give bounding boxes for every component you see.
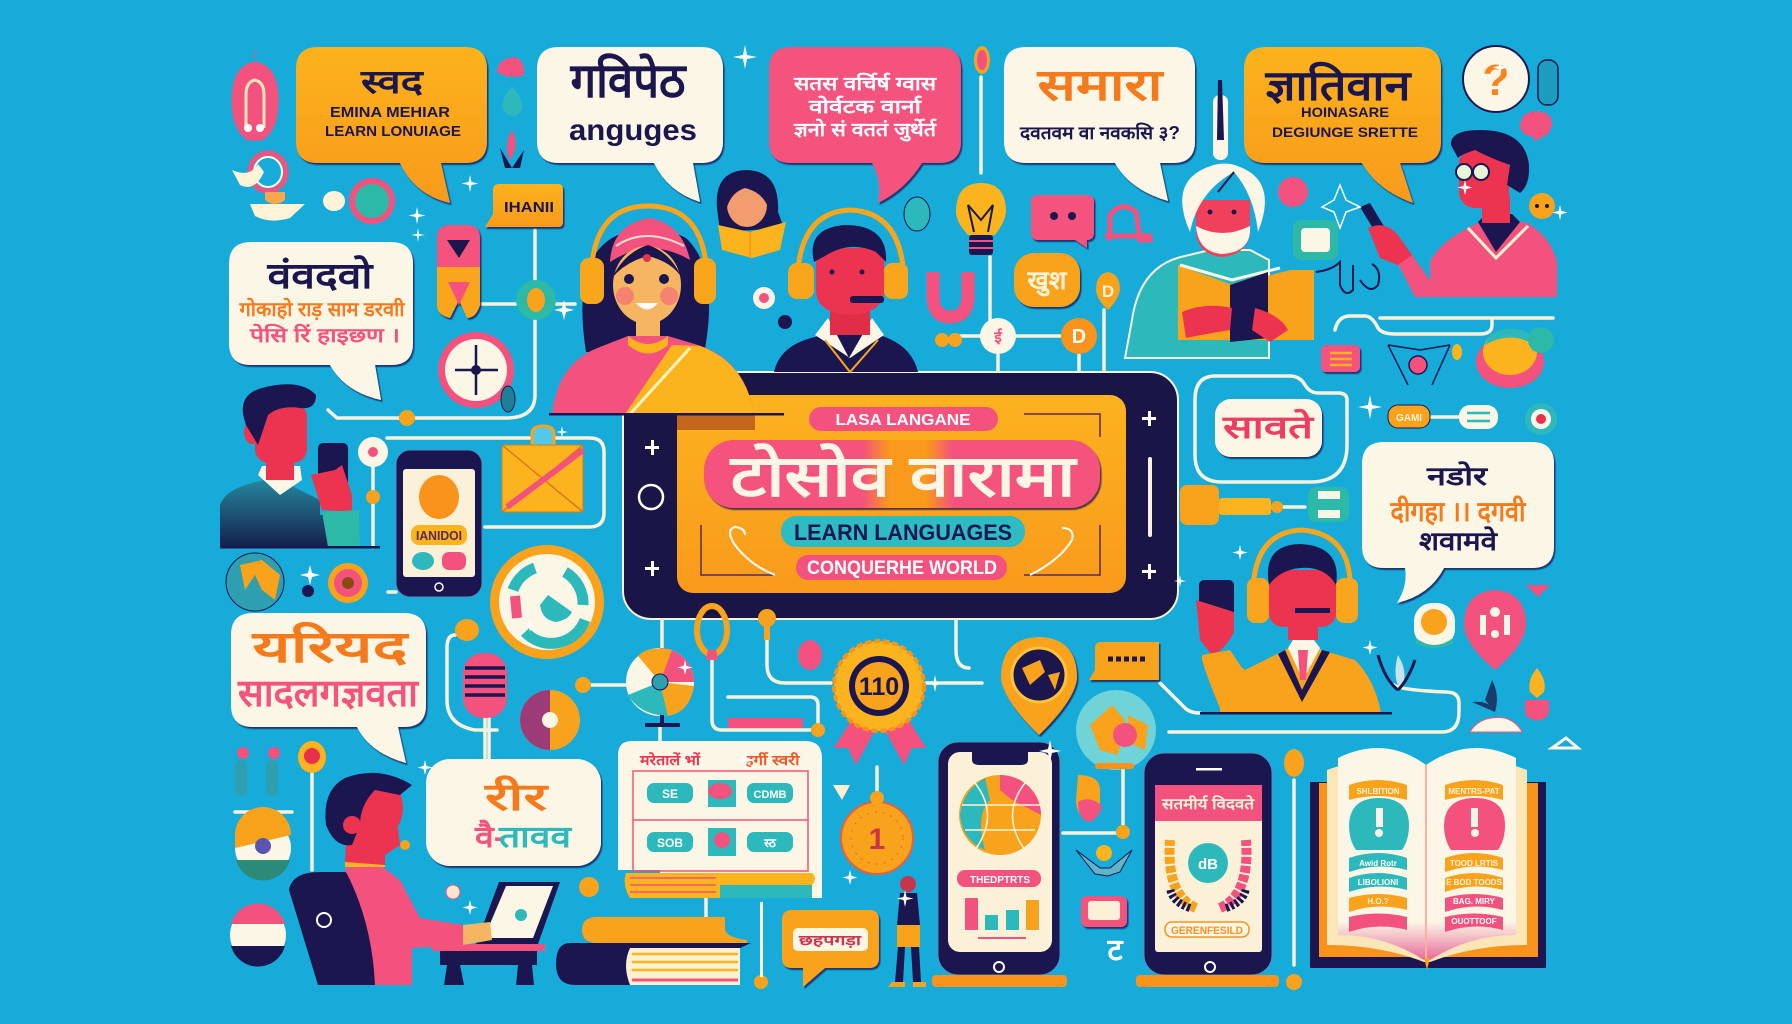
- icon: wire ball bottom: [754, 902, 768, 989]
- icon: timer: [841, 791, 913, 874]
- icon: ball on wire: [399, 410, 415, 426]
- speech bubble: cream right: शवामवे: [1419, 526, 1499, 556]
- icon: orange D pin: D: [1102, 282, 1114, 301]
- speech bubble: cream lower centre: [426, 759, 601, 866]
- speech bubble: cream right: दीगहा ।। दगवी: [1390, 495, 1527, 527]
- speech bubble: orange top right: ज्ञातिवान: [1264, 61, 1412, 109]
- icon: phone with globe: THEDPTRTS: [970, 875, 1030, 886]
- central phone: [623, 372, 1178, 619]
- icon: pink stack tag: [1321, 345, 1360, 372]
- speech bubble: orange top left: LEARN LONUIAGE: [325, 123, 461, 140]
- icon: small pink chat: [1520, 111, 1552, 142]
- icon: orange-red pin: [298, 741, 326, 773]
- connector wires: [235, 77, 1553, 965]
- icon: black dot: [302, 585, 314, 597]
- speech bubble: cream right: नडोर: [1426, 461, 1489, 491]
- icon: pink seal: [798, 640, 822, 670]
- icon: open book: MENTRS-PAT: [1448, 787, 1500, 796]
- icon: horseshoe pin top left: [232, 50, 278, 140]
- icon: cream coin: [446, 885, 460, 899]
- icon: teal lens: [349, 178, 395, 224]
- icon: small rings: [501, 287, 792, 412]
- icon: envelope: [502, 426, 583, 512]
- icon: phone with globe: [932, 742, 1067, 987]
- icon: phone with laurel: सतमीर्य विदवते: [1161, 795, 1256, 813]
- icon: orange chat tag with script: छहपगड़ा: [798, 932, 863, 948]
- icon: question mark circle: ?: [1483, 56, 1509, 105]
- icon: small cream node: [358, 437, 388, 504]
- icon: circular chart: [490, 545, 604, 659]
- icon: right side pills: GAMI: [1396, 413, 1422, 424]
- person: woman with headphones: [549, 206, 784, 416]
- title pill: main Hindi title: टोसोव वारामा: [729, 443, 1078, 509]
- speech bubble: orange top left: स्वद: [360, 63, 425, 100]
- person: man with headset: [774, 210, 918, 372]
- icon: clock: [438, 332, 514, 408]
- label: cream pill with red text: [1215, 399, 1322, 457]
- icon: lesson panel: मरेतालें भों: [639, 752, 702, 768]
- icon: pin wire balls: [1284, 749, 1304, 990]
- icon: plant leaves right: [1378, 655, 1497, 712]
- icon: orange script tile: [1014, 253, 1080, 307]
- icon: pink arch: [1108, 207, 1150, 240]
- icon: glasses squiggle: [1316, 262, 1379, 293]
- speech bubble: cream left: पेसि रिं हाइछण ।: [249, 323, 400, 347]
- icon: lesson panel: SE: [662, 787, 678, 801]
- speech bubble: cream top: गविपेठ: [570, 53, 688, 108]
- screen shadow patch: [677, 415, 755, 430]
- icon: small top-wire pin: [974, 46, 990, 74]
- icon: orange chat tag IHANII: IHANII: [504, 199, 554, 216]
- icon: stack of books: [556, 917, 751, 985]
- badge: rosette 110: [834, 641, 926, 765]
- icon: orange script tile: खुश: [1027, 265, 1068, 297]
- speech bubble: cream with orange heading: दवतवम वा नवकसि ३?: [1019, 122, 1180, 143]
- icon: bottom mid small items: [1076, 775, 1102, 822]
- icon: orange chat tag with script: [782, 910, 879, 987]
- icon: ball: [575, 677, 591, 693]
- icon: lesson panel: [618, 741, 822, 898]
- icon: capsule: [437, 225, 480, 318]
- icon: flags: [235, 807, 291, 881]
- speech bubble: cream with orange heading: [1004, 47, 1195, 201]
- icon: left phone: IANIDOI: [416, 528, 462, 543]
- icon: connector node D: D: [1072, 326, 1086, 348]
- title pill: CONQUERHE WORLD: CONQUERHE WORLD: [807, 558, 997, 579]
- phone screen: [677, 395, 1126, 593]
- person: man at laptop: [289, 773, 560, 985]
- icon: pie chart on stand: [626, 648, 694, 725]
- icon: open book: H.O.?: [1367, 897, 1389, 906]
- speech bubble: pink top: सतस वर्चिर्ष ग्वास: [793, 72, 937, 95]
- icon: open book: BAG. MIRY: [1453, 897, 1496, 906]
- badge: rosette 110: 110: [859, 673, 899, 701]
- icon: open book: LIBOLIONI: [1358, 878, 1398, 887]
- icon: small white script mark: ट: [1106, 934, 1124, 967]
- icon: orange ring tool: [697, 606, 727, 660]
- icon: small white mound: [1470, 718, 1522, 732]
- title pill: LASA LANGANE: [809, 407, 998, 431]
- speech bubble: cream lower left: यरियद: [251, 621, 410, 672]
- icon: orange dome: [1476, 327, 1554, 388]
- icon: lesson panel: CDMB: [754, 789, 787, 801]
- icon: sparkle star: [1322, 185, 1360, 228]
- speech bubble: cream left: वंवदवो: [266, 255, 374, 296]
- label: cream pill with red text: सावते: [1222, 408, 1315, 445]
- speech bubble: pink top: वोर्वटक वार्ना: [808, 95, 922, 118]
- screen decorative brackets: [701, 414, 1100, 575]
- icon: lightbulb: [956, 183, 1006, 255]
- icon: orange wire blob: [455, 619, 479, 641]
- icon: orange coin: [579, 877, 599, 897]
- speech bubble: orange top right: DEGIUNGE SRETTE: [1272, 124, 1418, 140]
- speech bubble: cream right: [1362, 442, 1554, 603]
- speech bubble: cream lower centre: रीर: [483, 775, 549, 819]
- person: man left with phone: [220, 384, 380, 548]
- icon: cream blob: [323, 191, 345, 211]
- icon: cream token: [1414, 603, 1455, 648]
- icon: glass globe on stand: [1076, 690, 1156, 839]
- icon: open book: SHLBITION: [1356, 787, 1400, 796]
- speech bubble: orange top left: EMINA MEHIAR: [330, 104, 450, 121]
- icon: pink map pin: [1464, 590, 1526, 670]
- speech bubble: cream lower left: [231, 613, 426, 763]
- icon: orange pin small: [1452, 344, 1462, 360]
- icon: teal medallion: [516, 280, 556, 320]
- person: small walking figure: [888, 876, 926, 987]
- icon: orange map pin with globe: [1001, 637, 1077, 735]
- icon: lesson panel: SOB: [657, 836, 683, 850]
- icon: cream pill: [1459, 405, 1498, 429]
- icon: teal box: [1308, 487, 1349, 522]
- phone buttons and plus marks: [639, 411, 1156, 579]
- icon: bar tag: [728, 718, 825, 737]
- icon: lesson panel: स्ठ: [763, 836, 777, 850]
- icon: pink pins: [235, 747, 280, 796]
- icon: triangle: [1552, 738, 1578, 748]
- icon: orange dots: [935, 333, 962, 347]
- speech bubble: orange top left: [296, 47, 487, 203]
- icon: open book: [1310, 748, 1546, 970]
- icon: lesson panel: हर्गी स्वरी: [743, 752, 801, 768]
- icon: small pie: [520, 690, 580, 750]
- icon: top ornaments: [497, 57, 524, 168]
- icon: small orange chat face: [1529, 193, 1555, 219]
- icon: orange D pin: [1096, 272, 1120, 310]
- icon: phone with laurel: GERENFESILD: [1171, 925, 1243, 937]
- icon: pink box: [1081, 896, 1127, 927]
- person: man top right with phone: [1360, 130, 1557, 297]
- icon: small globe: [226, 553, 284, 611]
- person: man right with headset and phone: [1196, 530, 1392, 714]
- icon: flower: [328, 563, 368, 603]
- speech bubble: orange top right: HOINASARE: [1301, 104, 1389, 120]
- speech bubble: cream lower centre: वै-: [474, 819, 505, 854]
- icon: open book: TOOD LRTIS: [1450, 859, 1499, 868]
- icon: flag lower: [230, 903, 286, 967]
- icon: question mark circle: [1463, 46, 1529, 112]
- icon: connector node D: [1061, 318, 1097, 354]
- speech bubble: pink top: [769, 47, 961, 203]
- icon: pink triangle: [1526, 585, 1550, 597]
- icon: left phone: [396, 450, 482, 597]
- speech bubble: orange top right: [1244, 47, 1441, 203]
- icon: open book: E BOD TOODS: [1446, 878, 1503, 887]
- speech bubble: cream lower left: सादलगज्ञवता: [237, 673, 419, 715]
- icon: connector node cream: [980, 318, 1016, 354]
- icon: pink chat bubble with dots: [1031, 195, 1094, 248]
- title pill: LEARN LANGUAGES: LEARN LANGUAGES: [794, 520, 1012, 545]
- icon: connector node cream: ई: [993, 328, 1003, 346]
- icon: golden sprout and pot: [1525, 668, 1549, 720]
- icon: microphone: [463, 653, 507, 718]
- icon: open book: OUOTTOOF: [1451, 917, 1497, 926]
- icon: target badge: [1525, 403, 1557, 435]
- icon: timer: 1: [869, 823, 885, 856]
- icon: pink button: [1278, 177, 1308, 207]
- person: man with turban reading book: [1125, 164, 1314, 358]
- sparkles: [300, 45, 1568, 915]
- icon: orange chat tag IHANII: [485, 184, 563, 227]
- icon: right side pills: [1388, 405, 1430, 428]
- icon: teal capsule: [1538, 60, 1558, 105]
- icon: magnet: [933, 272, 968, 317]
- title pill: LASA LANGANE: LASA LANGANE: [836, 412, 971, 429]
- icon: teal chat: [1293, 220, 1338, 260]
- icon: bird and ring: [232, 153, 305, 221]
- speech bubble: cream left: गोकाहो राड़ साम डरवाी: [238, 297, 405, 321]
- icon: orange chat tag with dots: [1089, 642, 1159, 680]
- icon: orange pin: [758, 609, 776, 640]
- icon: small teal lens near bulb: [904, 197, 930, 231]
- title pill: main Hindi title: [704, 440, 1100, 509]
- icon: cable plug: [1180, 485, 1283, 525]
- icon: phone with laurel: dB: [1198, 856, 1218, 873]
- speech bubble: cream lower centre: तावव: [498, 821, 573, 854]
- icon: pen: [1213, 80, 1228, 160]
- speech bubble: cream top: anguges: [569, 114, 697, 147]
- icon: gadget frame: [1388, 345, 1450, 385]
- icon: triangle cream: [833, 785, 850, 800]
- speech bubble: cream top: [537, 47, 723, 202]
- icon: phone with laurel: [1136, 753, 1279, 987]
- speech bubble: cream with orange heading: समारा: [1036, 61, 1165, 110]
- icon: winged hat: [1076, 845, 1132, 876]
- speech bubble: cream left: [229, 242, 413, 400]
- person: girl reading: [717, 170, 786, 258]
- icon: open book: Awid Rotr: [1359, 859, 1397, 868]
- speech bubble: pink top: ज्ञनो सं वततं जुर्थेर्त: [793, 118, 937, 142]
